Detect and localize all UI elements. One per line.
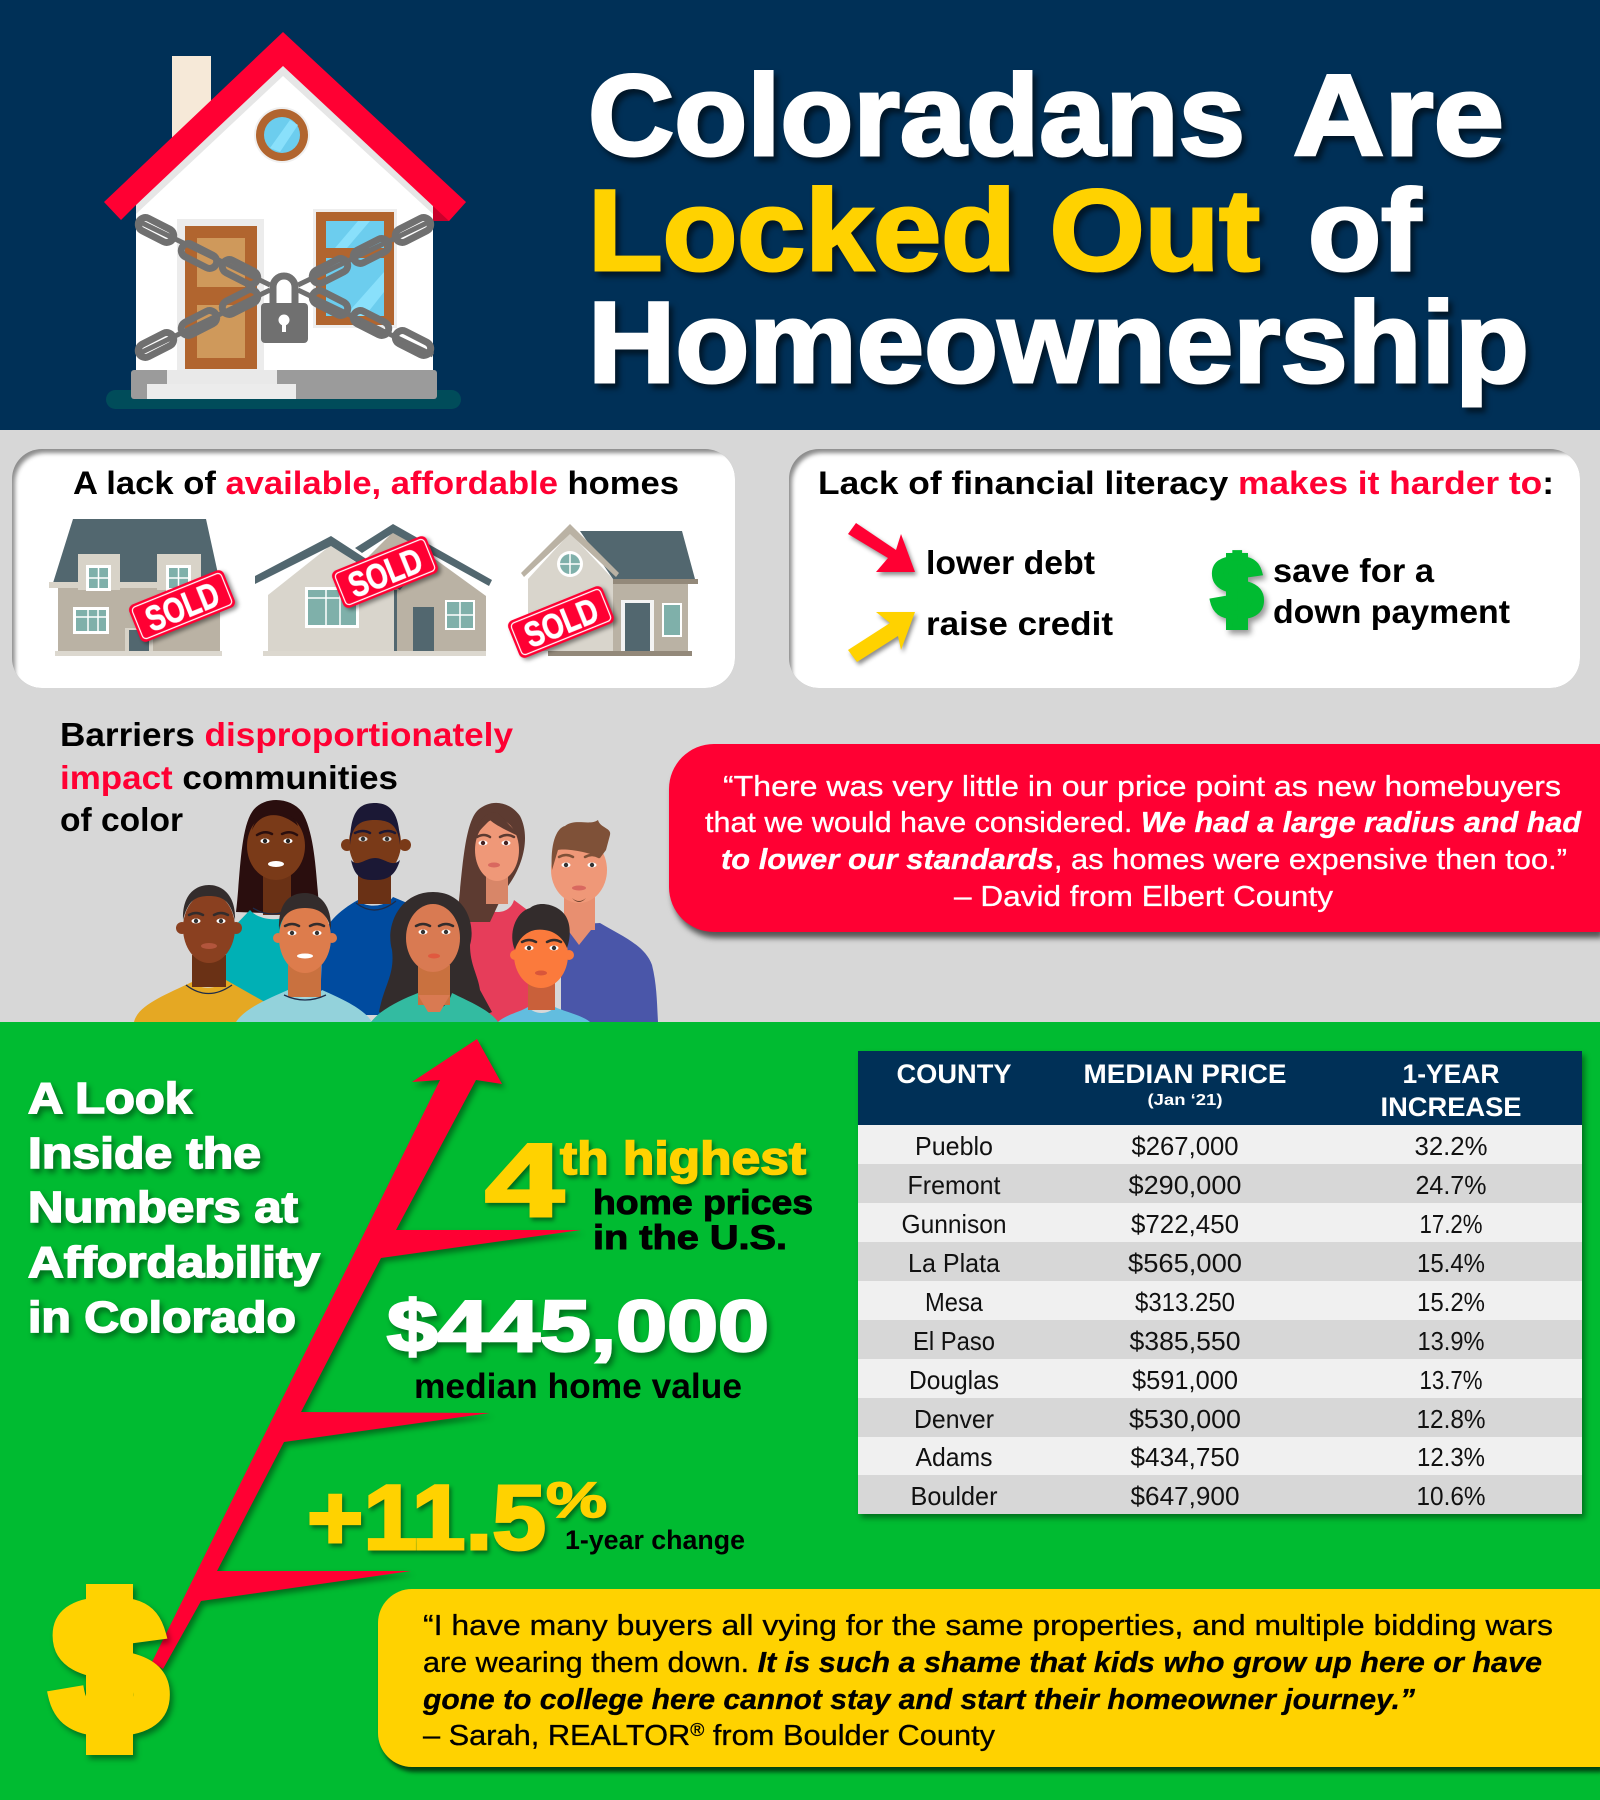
table rows: 17.2% xyxy=(1420,1209,1482,1239)
heading: a look inside the numbers xyxy=(28,1074,321,1342)
person: bearded man in blue xyxy=(320,803,412,1015)
table rows: 32.2% xyxy=(1414,1131,1488,1161)
callout: David quote: – David from Elbert County xyxy=(954,881,1334,913)
callout: Sarah quote: are wearing them down. It is such a shame that kids who grow up here or have xyxy=(423,1647,1542,1679)
label: raise credit: raise credit xyxy=(926,605,1113,642)
table rows: La Plata xyxy=(908,1248,1001,1278)
title: Locked Out xyxy=(588,167,1260,295)
callout: Sarah quote: from Boulder County xyxy=(704,1720,996,1752)
table rows: 15.2% xyxy=(1417,1287,1485,1317)
stat: one-year change: +11.5 xyxy=(307,1467,546,1569)
table rows: 12.8% xyxy=(1416,1404,1486,1434)
table header labels: (Jan ‘21) xyxy=(1148,1092,1222,1109)
panel: lack of available homes xyxy=(12,449,750,703)
table rows: $434,750 xyxy=(1130,1442,1240,1472)
illustration: group of people xyxy=(134,800,658,1022)
panel: affordability numbers xyxy=(0,1022,1600,1800)
stat: one-year change xyxy=(307,1467,745,1569)
icon: sold house 3 xyxy=(521,524,698,656)
table rows: 12.3% xyxy=(1417,1442,1485,1472)
title: Homeownership xyxy=(588,279,1529,407)
heading: a look inside the numbers: in Colorado xyxy=(28,1293,296,1342)
table rows: $647,900 xyxy=(1130,1481,1240,1511)
title: Coloradans xyxy=(588,52,1245,180)
table header labels: 1-YEAR xyxy=(1402,1059,1500,1089)
callout: Sarah quote xyxy=(378,1589,1600,1767)
table rows: $313.250 xyxy=(1135,1287,1235,1317)
table rows: $565,000 xyxy=(1128,1248,1242,1278)
icon: chained house xyxy=(104,32,466,409)
icon: chains xyxy=(136,215,433,360)
heading: a look inside the numbers: Affordability xyxy=(28,1238,321,1287)
table rows: Denver xyxy=(914,1404,994,1434)
stat: median home value: $445,000 xyxy=(387,1287,769,1367)
icon: sold house 1 xyxy=(49,519,222,656)
table rows: 13.7% xyxy=(1420,1365,1482,1395)
heading: barriers: of color xyxy=(60,801,183,838)
stat: 4th highest: 4 xyxy=(485,1123,564,1239)
heading: barriers xyxy=(60,716,514,838)
table rows: $722,450 xyxy=(1131,1209,1239,1239)
stat: median home value xyxy=(387,1287,769,1406)
table rows: Douglas xyxy=(909,1365,999,1395)
person: man with quiff in purple xyxy=(551,820,658,1022)
stat: one-year change: 1-year change xyxy=(565,1525,745,1555)
icon: yellow up arrow xyxy=(848,612,915,662)
person: man in yellow xyxy=(134,885,280,1022)
table header labels xyxy=(896,1059,1522,1122)
panel: financial literacy xyxy=(789,449,1595,703)
heading: financial literacy: Lack of financial literacy makes it harder to : xyxy=(818,465,1554,501)
person: woman with brown hair xyxy=(456,803,530,1022)
person: woman with wavy hair in green xyxy=(371,892,498,1022)
heading: barriers: Barriers disproportionately xyxy=(60,716,514,753)
callout: Sarah quote: “I have many buyers all vying for the same properties, and multiple bidding wars xyxy=(423,1610,1553,1642)
callout: David quote: “There was very little in our price point as new homebuyers xyxy=(723,771,1561,803)
person: curly-haired man xyxy=(498,904,590,1022)
heading: a look inside the numbers: A Look xyxy=(28,1074,193,1123)
table rows: $385,550 xyxy=(1130,1326,1240,1356)
table rows xyxy=(902,1131,1488,1511)
table rows: $267,000 xyxy=(1132,1131,1238,1161)
table rows: 15.4% xyxy=(1417,1248,1485,1278)
heading: available affordable homes: A lack of available, affordable homes xyxy=(73,465,679,501)
table: county prices xyxy=(858,1051,1582,1514)
label: save for a down payment xyxy=(1273,552,1510,630)
table rows: Pueblo xyxy=(915,1131,993,1161)
stat: 4th highest: th highest xyxy=(560,1132,806,1184)
title: of xyxy=(1308,167,1422,295)
sold stamp 3: SOLD xyxy=(519,591,604,656)
table rows: Adams xyxy=(916,1442,992,1472)
heading: barriers: impact communities xyxy=(60,759,398,796)
stat: one-year change: % xyxy=(546,1472,607,1528)
table header labels: INCREASE xyxy=(1380,1092,1522,1122)
table header labels: MEDIAN PRICE xyxy=(1084,1059,1286,1089)
stat: 4th highest xyxy=(485,1123,813,1257)
table rows: $290,000 xyxy=(1128,1170,1242,1200)
heading: a look inside the numbers: Inside the xyxy=(28,1129,261,1178)
callout: Sarah quote: ® xyxy=(690,1720,704,1740)
heading: a look inside the numbers: Numbers at xyxy=(28,1183,298,1232)
icon: green dollar sign: $ xyxy=(1211,538,1263,637)
callout: Sarah quote: – Sarah, REALTOR xyxy=(423,1720,675,1752)
sold stamp 1: SOLD xyxy=(140,575,225,640)
callout: David quote xyxy=(669,744,1600,932)
label: save for a down payment: save for a xyxy=(1273,552,1435,589)
callout: David quote: to lower our standards , as homes were expensive then too.” xyxy=(721,844,1567,876)
table rows: 10.6% xyxy=(1416,1481,1486,1511)
stat: 4th highest: home prices xyxy=(593,1184,813,1222)
table rows: Mesa xyxy=(925,1287,983,1317)
stat: median home value: median home value xyxy=(414,1367,742,1406)
icon: red down arrow xyxy=(848,523,915,572)
title: Are xyxy=(1293,52,1504,180)
icon: sold house 2 xyxy=(255,524,492,656)
arrow: rising red price arrow xyxy=(152,1039,581,1669)
label: lower debt: lower debt xyxy=(926,544,1095,581)
callout: Sarah quote: gone to college here cannot stay and start their homeowner journey.” xyxy=(422,1684,1416,1716)
table rows: $530,000 xyxy=(1129,1404,1241,1434)
table rows: 13.9% xyxy=(1418,1326,1484,1356)
table rows: Fremont xyxy=(908,1170,1001,1200)
sold stamp 2: SOLD xyxy=(343,541,428,606)
callout: David quote: that we would have considered. We had a large radius and had xyxy=(705,807,1582,839)
table rows: El Paso xyxy=(913,1326,995,1356)
panel: header band xyxy=(0,0,1600,430)
table rows: Gunnison xyxy=(902,1209,1006,1239)
person: smiling man in light blue xyxy=(236,893,372,1022)
table rows: 24.7% xyxy=(1416,1170,1486,1200)
label: save for a down payment: down payment xyxy=(1273,593,1510,630)
icon: large yellow dollar sign: $ xyxy=(50,1557,168,1776)
table rows: Boulder xyxy=(910,1481,998,1511)
icon: padlock xyxy=(261,276,308,343)
table header labels: COUNTY xyxy=(896,1059,1012,1089)
title xyxy=(588,52,1529,407)
person: woman with long dark hair xyxy=(226,800,320,1005)
stat: 4th highest: in the U.S. xyxy=(593,1219,787,1257)
table rows: $591,000 xyxy=(1132,1365,1238,1395)
